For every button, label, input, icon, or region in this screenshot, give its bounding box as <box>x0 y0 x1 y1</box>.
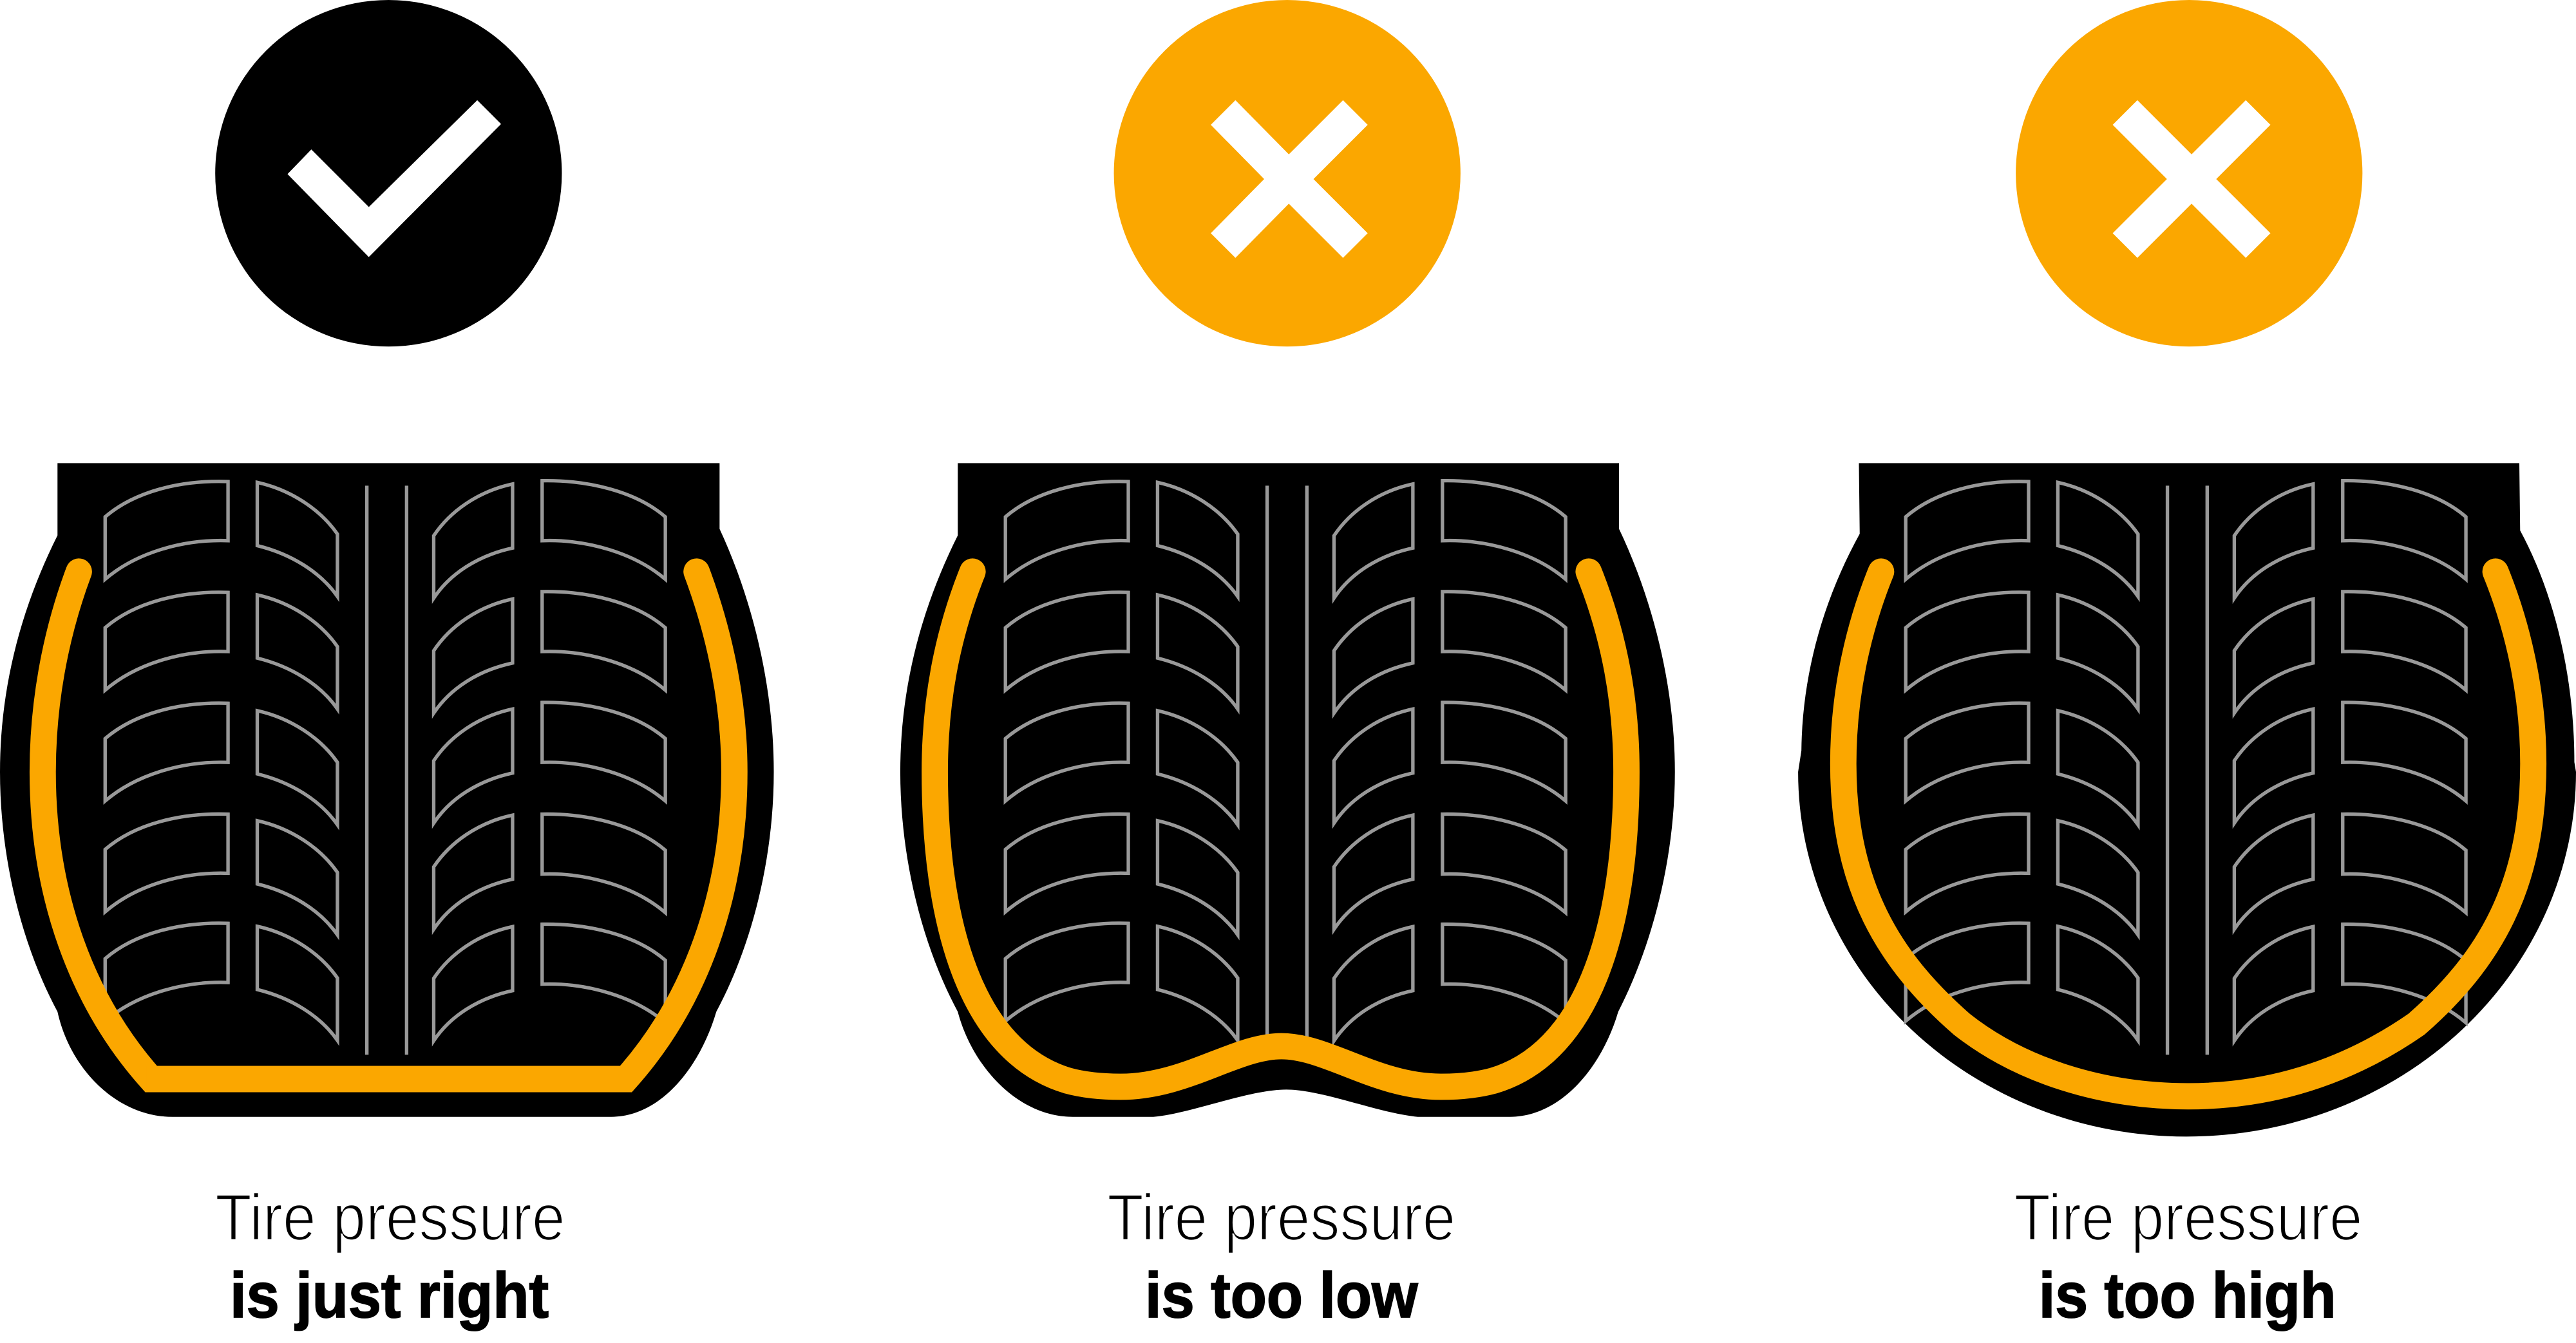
tire: overinflated, rounded contact <box>1798 463 2576 1136</box>
caption: is just right: is just right <box>230 1260 549 1331</box>
caption: is too high <box>2014 1181 2362 1331</box>
caption: is just right: Tire pressure <box>215 1181 565 1254</box>
tire: correct pressure, flat contact <box>0 463 774 1117</box>
panel: tire pressure just right <box>0 0 774 1331</box>
caption: is too low: is too low <box>1145 1260 1418 1331</box>
caption: is too low <box>1107 1181 1455 1331</box>
panel: tire pressure too low <box>900 0 1675 1331</box>
panel: tire pressure too high <box>1798 0 2576 1331</box>
icon: orange circle with cross <box>2016 0 2362 346</box>
caption: is just right <box>215 1181 565 1331</box>
icon: orange circle with cross <box>1114 0 1461 346</box>
caption: is too high: Tire pressure <box>2014 1181 2362 1254</box>
caption: is too low: Tire pressure <box>1107 1181 1455 1254</box>
icon: black circle with check mark <box>215 0 562 346</box>
tire: underinflated, concave contact <box>900 463 1675 1117</box>
caption: is too high: is too high <box>2039 1260 2336 1331</box>
